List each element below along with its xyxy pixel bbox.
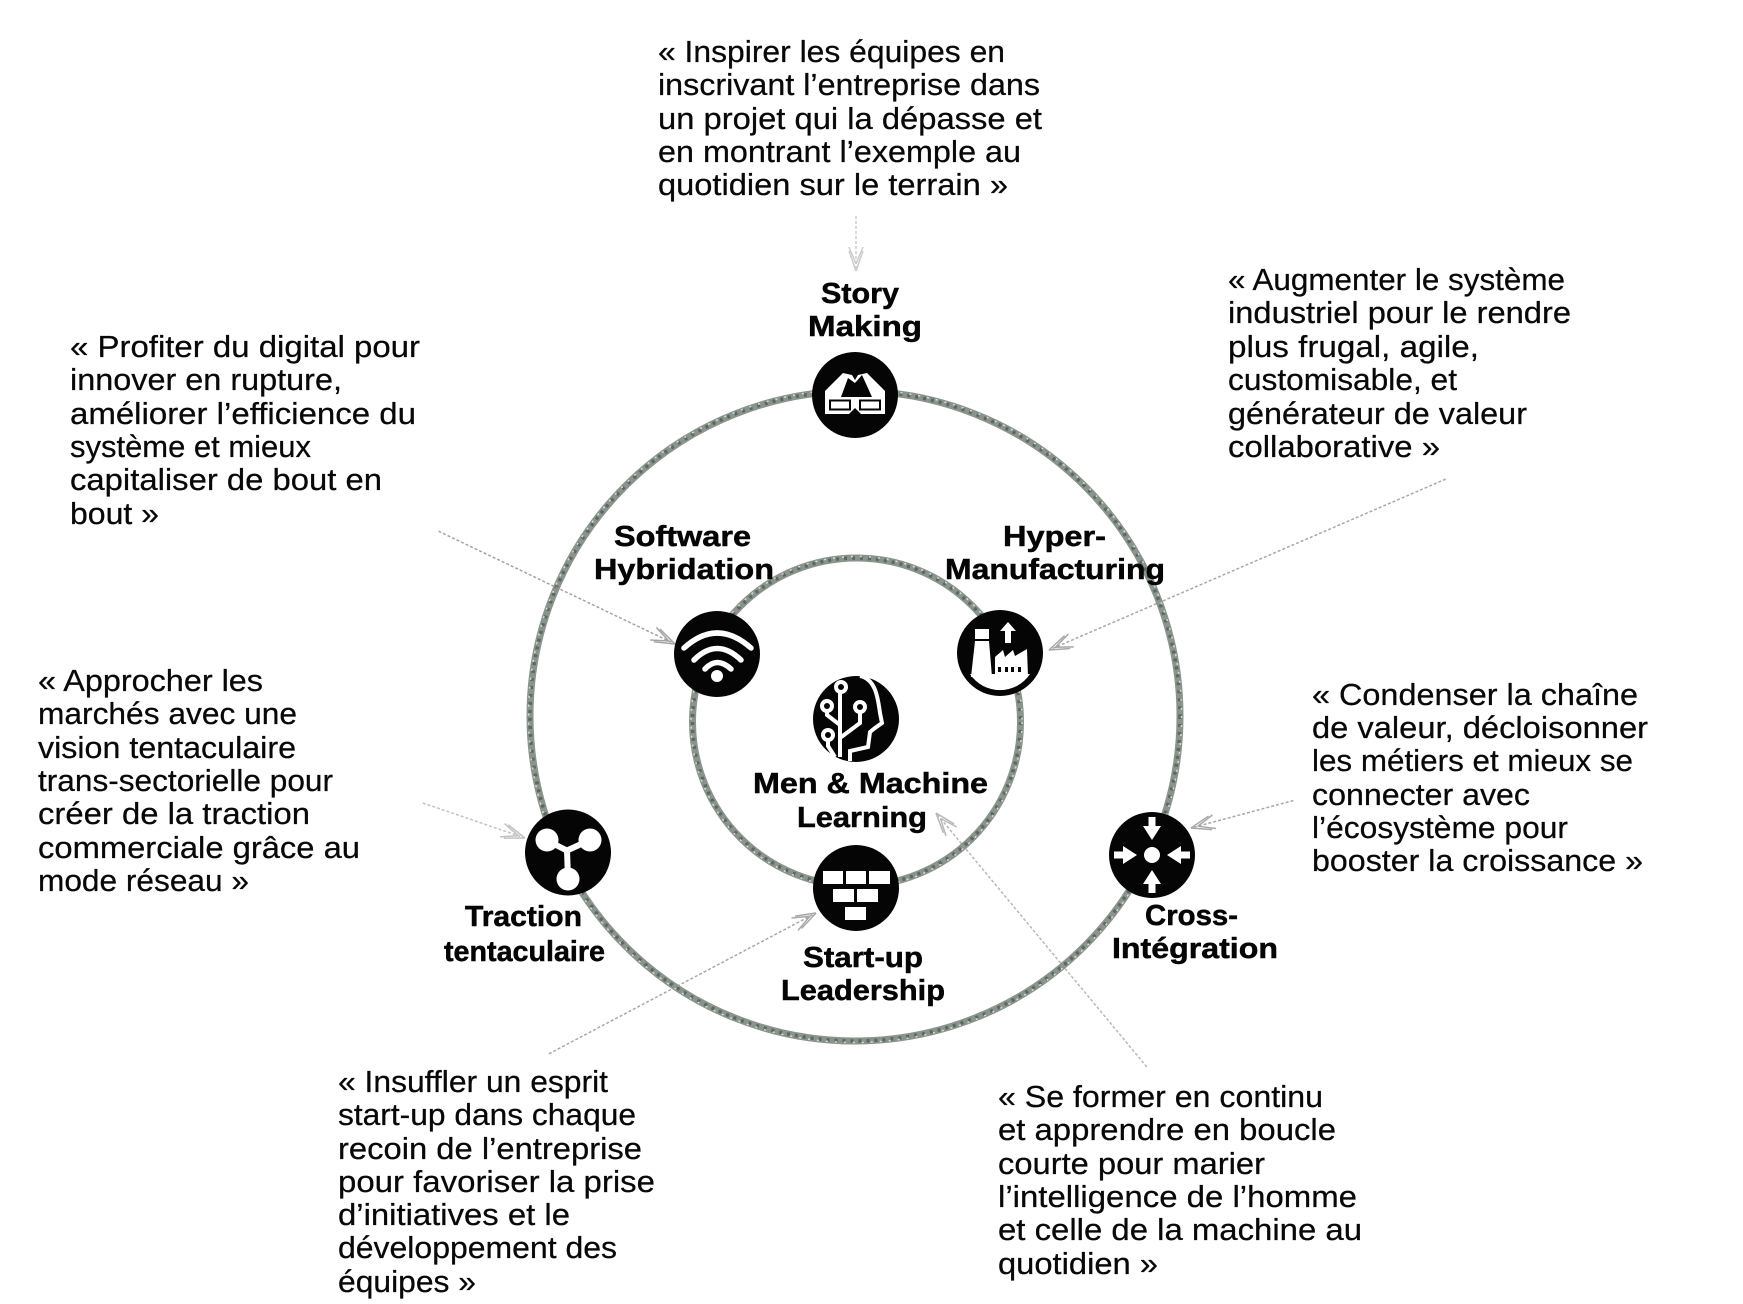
text block: profiter du digital: capitaliser de bout en: [70, 462, 382, 497]
text block: condenser la chaîne de valeur: [1312, 677, 1648, 878]
label: Software Hybridation: Hybridation: [594, 554, 774, 586]
text block: augmenter le système industriel: industriel pour le rendre: [1228, 295, 1571, 330]
outer ring: [528, 390, 1182, 1042]
label: Traction tentaculaire: Traction: [465, 901, 582, 933]
text block: condenser la chaîne de valeur: de valeur, décloisonner: [1312, 710, 1648, 745]
text block: insuffler un esprit start-up: start-up dans chaque: [338, 1097, 636, 1132]
text block: augmenter le système industriel: générateur de valeur: [1228, 396, 1527, 431]
text block: augmenter le système industriel: « Augmenter le système: [1228, 262, 1565, 297]
text block: insuffler un esprit start-up: développement des: [338, 1230, 617, 1265]
inner ring: [691, 556, 1022, 888]
label: Hyper-Manufacturing: [945, 521, 1165, 586]
text block: profiter du digital: améliorer l’efficience du: [70, 396, 416, 431]
icon: converging arrows (cross-integration): [1109, 812, 1195, 898]
label: Traction tentaculaire: tentaculaire: [444, 936, 605, 968]
text block: inspirer les équipes: « Inspirer les équipes en: [658, 34, 1005, 69]
arrow: markets to traction: [421, 796, 527, 845]
icon: brick pyramid (start-up leadership): [813, 845, 899, 931]
label: Story Making: Story: [821, 278, 899, 310]
label: Men & Machine Learning: Learning: [797, 802, 927, 834]
text block: augmenter le système industriel: plus frugal, agile,: [1228, 329, 1479, 364]
text block: augmenter le système industriel: [1228, 262, 1571, 464]
text block: profiter du digital: système et mieux: [70, 429, 311, 464]
icon: network nodes (traction tentaculaire): [525, 810, 611, 896]
icon: wifi (software hybridation): [674, 611, 760, 697]
text block: inspirer les équipes: un projet qui la dépasse et: [658, 101, 1042, 136]
text block: approcher les marchés: [38, 663, 360, 898]
text block: approcher les marchés: marchés avec une: [38, 696, 297, 731]
label: Start-up Leadership: Leadership: [781, 975, 945, 1007]
label: Story Making: [808, 278, 922, 343]
text block: se former en continu: courte pour marier: [998, 1146, 1265, 1181]
text block: approcher les marchés: commerciale grâce au: [38, 830, 360, 865]
text block: condenser la chaîne de valeur: booster la croissance »: [1312, 843, 1643, 878]
text block: condenser la chaîne de valeur: « Condenser la chaîne: [1312, 677, 1638, 712]
arrow: continuous learning to men and machine learning: [931, 809, 1152, 1071]
text block: se former en continu: et celle de la machine au: [998, 1212, 1362, 1247]
label: Story Making: Making: [808, 311, 922, 343]
text block: augmenter le système industriel: customisable, et: [1228, 362, 1457, 397]
text block: se former en continu: « Se former en continu: [998, 1079, 1323, 1114]
label: Software Hybridation: Software: [614, 521, 751, 553]
text block: inspirer les équipes: [658, 34, 1042, 202]
text block: condenser la chaîne de valeur: l’écosystème pour: [1312, 810, 1568, 845]
text block: profiter du digital: « Profiter du digital pour: [70, 329, 420, 364]
label: Men & Machine Learning: [753, 768, 988, 834]
label: Men & Machine Learning: Men & Machine: [753, 768, 988, 800]
arrow: value chain to cross-integration: [1189, 794, 1295, 835]
label: Hyper-Manufacturing: Manufacturing: [945, 554, 1165, 586]
icon: 3D glasses (story making): [812, 352, 898, 438]
text block: insuffler un esprit start-up: [338, 1064, 655, 1299]
label: Start-up Leadership: [781, 942, 945, 1007]
label: Cross-Intégration: [1112, 900, 1278, 965]
text block: condenser la chaîne de valeur: les métiers et mieux se: [1312, 743, 1633, 778]
label: Start-up Leadership: Start-up: [803, 942, 923, 974]
text block: approcher les marchés: « Approcher les: [38, 663, 263, 698]
text block: approcher les marchés: mode réseau »: [38, 863, 249, 898]
icon: factory (hyper-manufacturing): [957, 610, 1043, 696]
icon: AI head (men and machine learning): [813, 676, 899, 762]
text block: insuffler un esprit start-up: équipes »: [338, 1264, 476, 1299]
text block: profiter du digital: innover en rupture,: [70, 362, 342, 397]
text block: approcher les marchés: vision tentaculaire: [38, 730, 296, 765]
text block: insuffler un esprit start-up: recoin de l’entreprise: [338, 1131, 642, 1166]
text block: inspirer les équipes: en montrant l’exemple au: [658, 134, 1021, 169]
text block: approcher les marchés: créer de la traction: [38, 796, 310, 831]
arrow: digital to software hybridation: [436, 525, 678, 650]
label: Cross-Intégration: Cross-: [1145, 900, 1238, 932]
arrow: inspirer to story making: [849, 216, 863, 271]
text block: condenser la chaîne de valeur: connecter avec: [1312, 777, 1530, 812]
arrow: start-up spirit to start-up leadership: [546, 907, 819, 1060]
text block: se former en continu: l’intelligence de l’homme: [998, 1179, 1357, 1214]
text block: insuffler un esprit start-up: pour favoriser la prise: [338, 1164, 655, 1199]
arrow: industrial system to hyper-manufacturing: [1046, 473, 1449, 656]
text block: se former en continu: [998, 1079, 1362, 1281]
label: Hyper-Manufacturing: Hyper-: [1003, 521, 1106, 553]
label: Software Hybridation: [594, 521, 774, 586]
text block: insuffler un esprit start-up: « Insuffler un esprit: [338, 1064, 608, 1099]
text block: approcher les marchés: trans-sectorielle pour: [38, 763, 333, 798]
label: Cross-Intégration: Intégration: [1112, 933, 1278, 965]
text block: insuffler un esprit start-up: d’initiatives et le: [338, 1197, 570, 1232]
text block: inspirer les équipes: inscrivant l’entreprise dans: [658, 67, 1040, 102]
text block: inspirer les équipes: quotidien sur le terrain »: [658, 167, 1008, 202]
text block: augmenter le système industriel: collaborative »: [1228, 429, 1440, 464]
text block: se former en continu: quotidien »: [998, 1246, 1158, 1281]
text block: profiter du digital: [70, 329, 420, 531]
label: Traction tentaculaire: [444, 901, 605, 968]
text block: profiter du digital: bout »: [70, 496, 159, 531]
text block: se former en continu: et apprendre en boucle: [998, 1112, 1336, 1147]
